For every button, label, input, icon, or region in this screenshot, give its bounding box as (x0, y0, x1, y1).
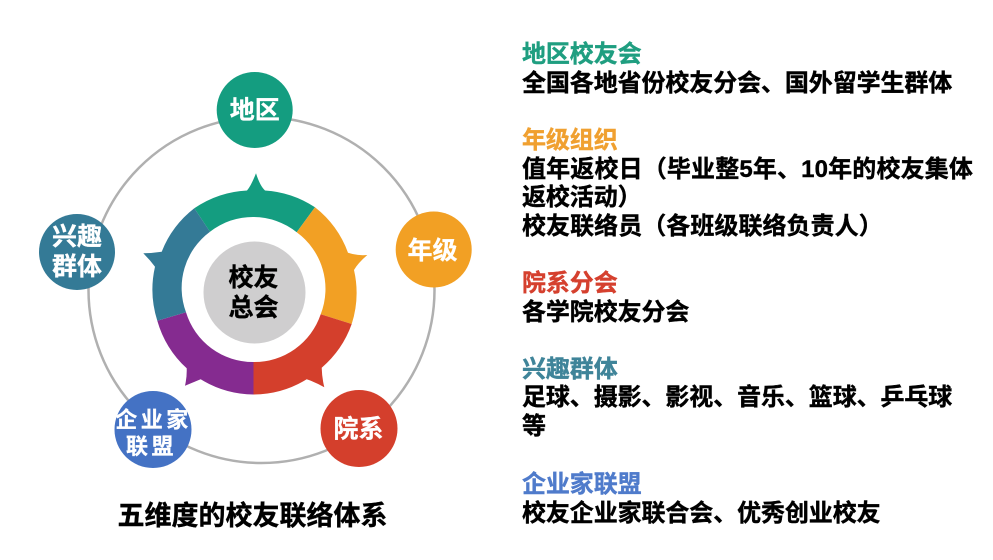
node: 地区: 地区 (230, 96, 280, 124)
text block: 兴趣群体 (522, 356, 952, 440)
outer connecting ring (88, 117, 434, 463)
text block: 地区校友会: 地区校友会 (522, 41, 642, 68)
node: 兴趣群体 (39, 214, 115, 290)
text block: 院系分会 (522, 269, 689, 326)
node: 地区 (217, 72, 293, 148)
text block: 兴趣群体: 兴趣群体 (522, 356, 618, 383)
center hub: 校友总会: 校友 (228, 264, 279, 292)
center hub: 校友总会 (204, 242, 306, 344)
caption: 五维度的校友联络体系 (118, 501, 388, 531)
node: 年级 (396, 212, 472, 288)
node: 院系: 院系 (333, 416, 384, 444)
text block: 地区校友会 (522, 41, 952, 97)
text block: 年级组织: 值年返校日（毕业整5年、10年的校友集体 (522, 156, 973, 183)
node: 兴趣群体: 兴趣 (52, 223, 102, 251)
node: 企业家联盟: 联盟 (126, 434, 177, 459)
ring segment: purple (157, 312, 254, 394)
text block: 院系分会: 各学院校友分会 (522, 298, 689, 326)
text block: 年级组织: 年级组织 (522, 127, 618, 154)
text block: 企业家联盟: 企业家联盟 (522, 471, 642, 498)
ring segment: green (194, 173, 315, 232)
node: 院系 (320, 390, 398, 467)
ring segment: teal (143, 208, 210, 321)
text block: 兴趣群体: 等 (522, 413, 546, 440)
node: 兴趣群体: 群体 (52, 253, 102, 281)
text block: 年级组织: 校友联络员（各班级联络负责人） (522, 212, 883, 240)
text block: 院系分会: 院系分会 (522, 269, 618, 297)
text block: 年级组织 (522, 127, 973, 240)
text block: 地区校友会: 全国各地省份校友分会、国外留学生群体 (522, 69, 952, 97)
text block: 企业家联盟: 校友企业家联合会、优秀创业校友 (522, 500, 881, 527)
node: 企业家联盟 (114, 391, 192, 468)
node: 企业家联盟: 企业家 (115, 408, 192, 432)
text block: 兴趣群体: 足球、摄影、影视、音乐、篮球、乒乓球 (522, 384, 952, 411)
center hub: 校友总会: 总会 (228, 294, 279, 322)
text block: 年级组织: 返校活动） (522, 184, 642, 211)
node: 年级: 年级 (407, 237, 458, 265)
text block: 企业家联盟 (522, 471, 881, 527)
ring segment: red (254, 314, 352, 394)
diagram: five-dimension alumni network (39, 72, 472, 468)
ring segment: orange (297, 207, 367, 324)
